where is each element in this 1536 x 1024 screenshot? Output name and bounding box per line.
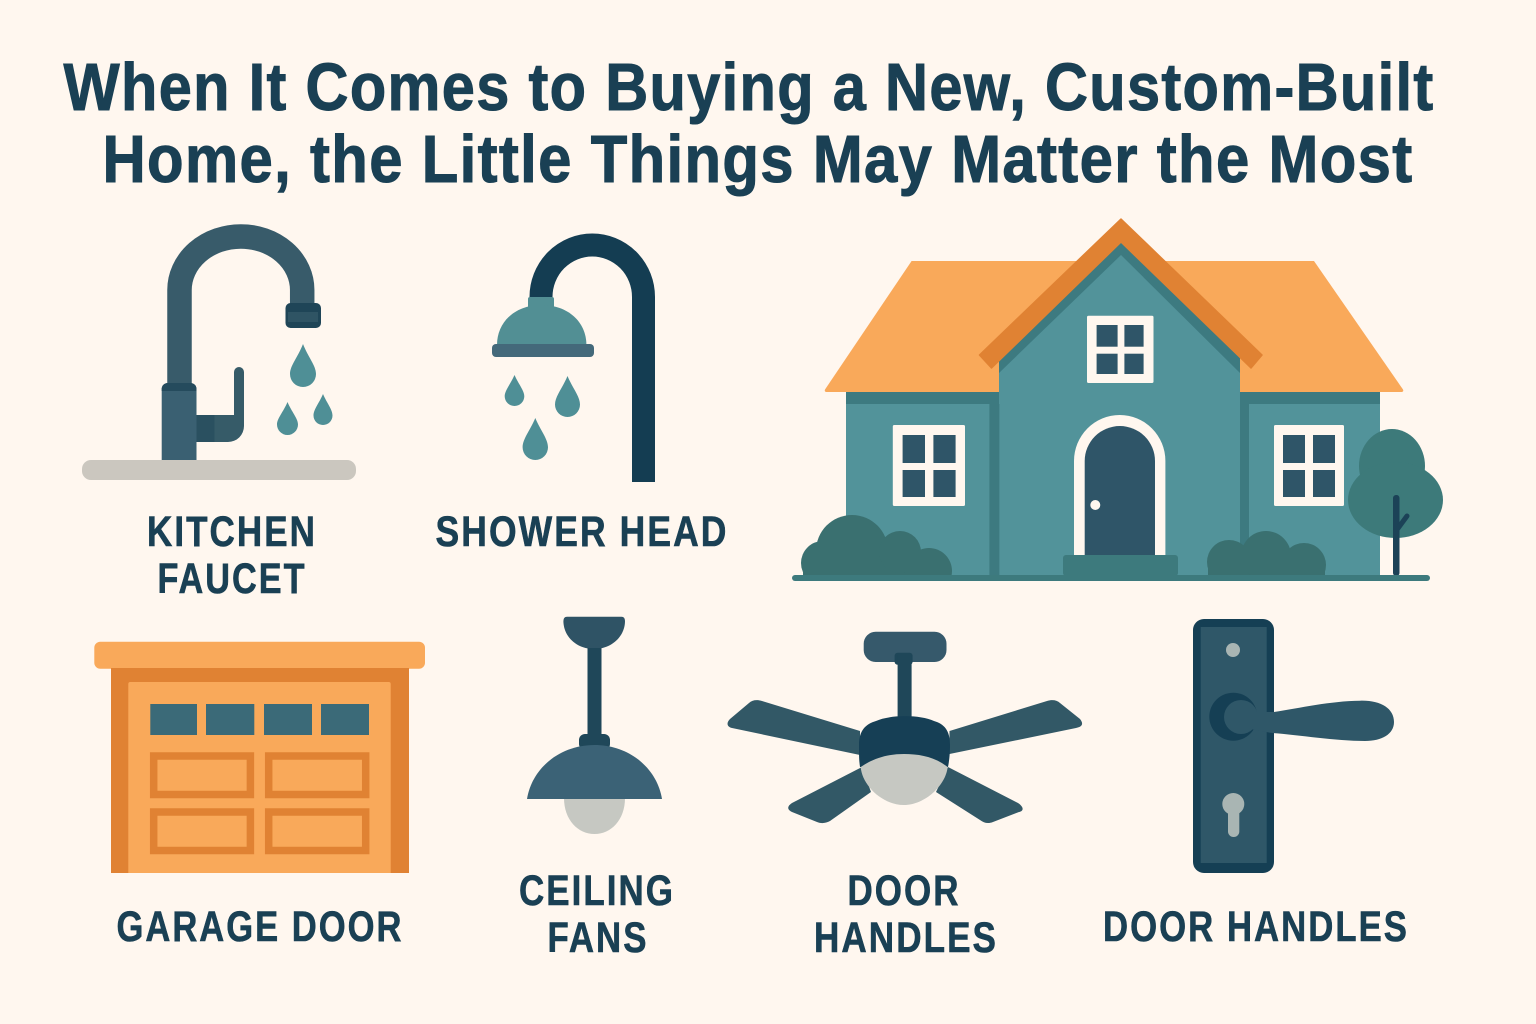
label: garage door: GARAGE DOOR xyxy=(116,903,404,951)
icon: pendant light xyxy=(527,617,662,834)
label: ceiling fans xyxy=(519,867,675,962)
icon: ceiling fan xyxy=(728,632,1082,823)
icon: shower head xyxy=(492,245,644,482)
label: ceiling fans: CEILING xyxy=(519,867,675,915)
house windows xyxy=(893,316,1344,506)
house door xyxy=(1063,415,1178,576)
label: ceiling fans: FANS xyxy=(548,914,648,962)
label: door handles (fan): HANDLES xyxy=(814,914,998,962)
title xyxy=(64,50,1434,197)
icon: door handle xyxy=(1193,619,1394,873)
label: door handles (fan): DOOR xyxy=(848,867,960,915)
ground line xyxy=(792,575,1430,581)
label: kitchen faucet: KITCHEN xyxy=(147,508,317,556)
icon: kitchen faucet xyxy=(82,236,356,480)
icon: house xyxy=(792,219,1443,594)
title: Home, the Little Things May Matter the Most xyxy=(102,122,1414,197)
label: shower head: SHOWER HEAD xyxy=(436,508,728,556)
label: kitchen faucet: FAUCET xyxy=(158,555,306,603)
bushes and tree xyxy=(801,429,1443,594)
label: door handles: DOOR HANDLES xyxy=(1103,903,1409,951)
label: door handles (fan) xyxy=(814,867,998,962)
icon: garage door xyxy=(94,642,425,873)
label: kitchen faucet xyxy=(147,508,317,603)
